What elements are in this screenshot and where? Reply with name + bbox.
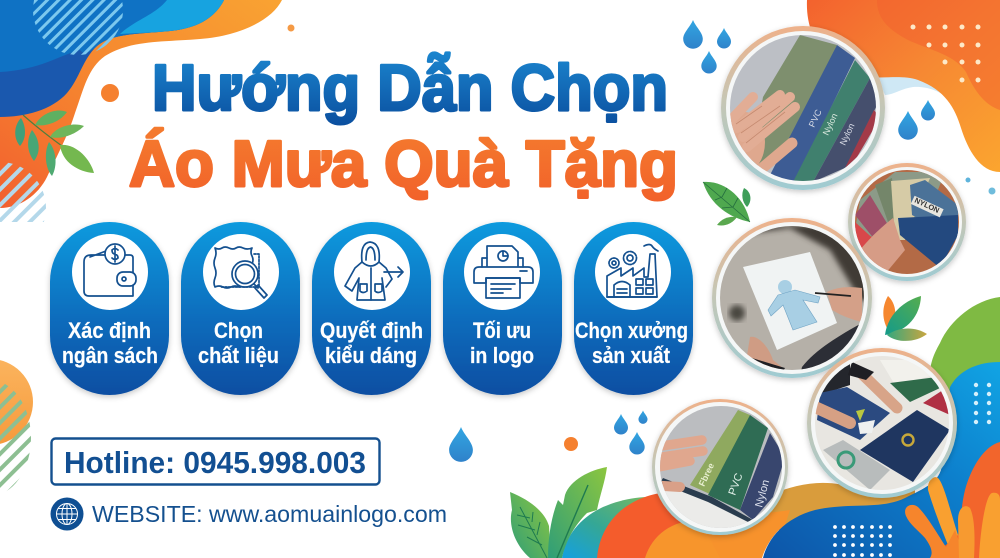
photo: fabric strips with hand: PVC — [807, 107, 824, 129]
icon: water drops — [449, 20, 996, 462]
icon: top-left leaf branch — [15, 111, 94, 176]
panel: step 3 style: Quyết định — [320, 318, 423, 343]
panel: step 5 factory — [574, 222, 693, 395]
decorative dot: lower orange — [564, 437, 578, 451]
icon: tri-colour leaf — [883, 296, 927, 341]
title: Áo Mưa Quà Tặng — [129, 127, 678, 200]
bottom-centre colour arcs — [562, 493, 720, 558]
icon: fabric and magnifier — [214, 247, 267, 298]
panel: step 4 logo printing — [443, 222, 562, 395]
photo: fabric strips with hand — [721, 26, 885, 190]
panel: step 2 material: Chọn — [214, 318, 263, 343]
photo: three fabric samples labelled: PVC — [727, 472, 746, 497]
dot grid: top-right white dots — [910, 24, 980, 82]
panel: step 4 logo printing: in logo — [470, 343, 534, 368]
title: Hướng Dẫn Chọn — [152, 51, 668, 124]
icon: right-middle green leaf — [703, 182, 750, 226]
panel: step 1 budget: ngân sách — [62, 343, 158, 368]
photo: three fabric samples labelled — [648, 399, 790, 535]
dot grid: bottom white dots — [833, 525, 892, 557]
photo: fabric swatches labelled nylon: NYLON — [913, 196, 941, 215]
panel: step 5 factory: sản xuất — [592, 343, 670, 368]
icon: factory and gears — [607, 244, 658, 297]
decorative dots: top-left orange — [101, 24, 294, 102]
icon: globe — [56, 504, 78, 524]
photo: fabric swatches labelled nylon — [848, 163, 966, 281]
photo: three fabric samples labelled: Fbree — [697, 461, 716, 488]
panel: step 1 budget: Xác định — [68, 318, 151, 343]
title — [129, 51, 678, 200]
hotline box: Hotline: 0945.998.003 — [64, 445, 366, 480]
photo: fabric strips with hand: Nylon — [838, 122, 857, 147]
panel: step 3 style: kiểu dáng — [325, 343, 417, 368]
icon: raincoat with arrow — [345, 242, 403, 300]
website line: WEBSITE: www.aomuainlogo.com — [92, 501, 447, 527]
panel: step 5 factory: Chọn xưởng — [575, 318, 688, 343]
photo: logo printed raincoats on table — [807, 348, 957, 498]
background blob: lower-left orange with stripes — [0, 359, 34, 498]
photo: raincoat design sketch — [712, 218, 872, 378]
background blob: top-left orange and blue waves — [0, 0, 282, 222]
panel: step 4 logo printing: Tối ưu — [473, 318, 531, 343]
panel: step 2 material: chất liệu — [198, 343, 279, 368]
photo: fabric strips with hand: Nylon — [821, 112, 840, 137]
panel: step 1 budget — [50, 222, 169, 395]
panel: step 2 material — [181, 222, 300, 395]
panel: step 3 style — [312, 222, 431, 395]
icon: wallet — [84, 244, 136, 296]
background blobs: bottom-right green, gold, orange and blue — [590, 297, 1000, 558]
dot grid: right blue panel white dots — [974, 383, 991, 424]
splash: bottom-right orange fingers — [905, 442, 1000, 558]
background blob: top-right orange — [807, 0, 1000, 172]
icon: printer — [474, 246, 533, 298]
photo: three fabric samples labelled: Nylon — [753, 479, 772, 509]
icon: bottom-centre leaves — [510, 467, 607, 558]
